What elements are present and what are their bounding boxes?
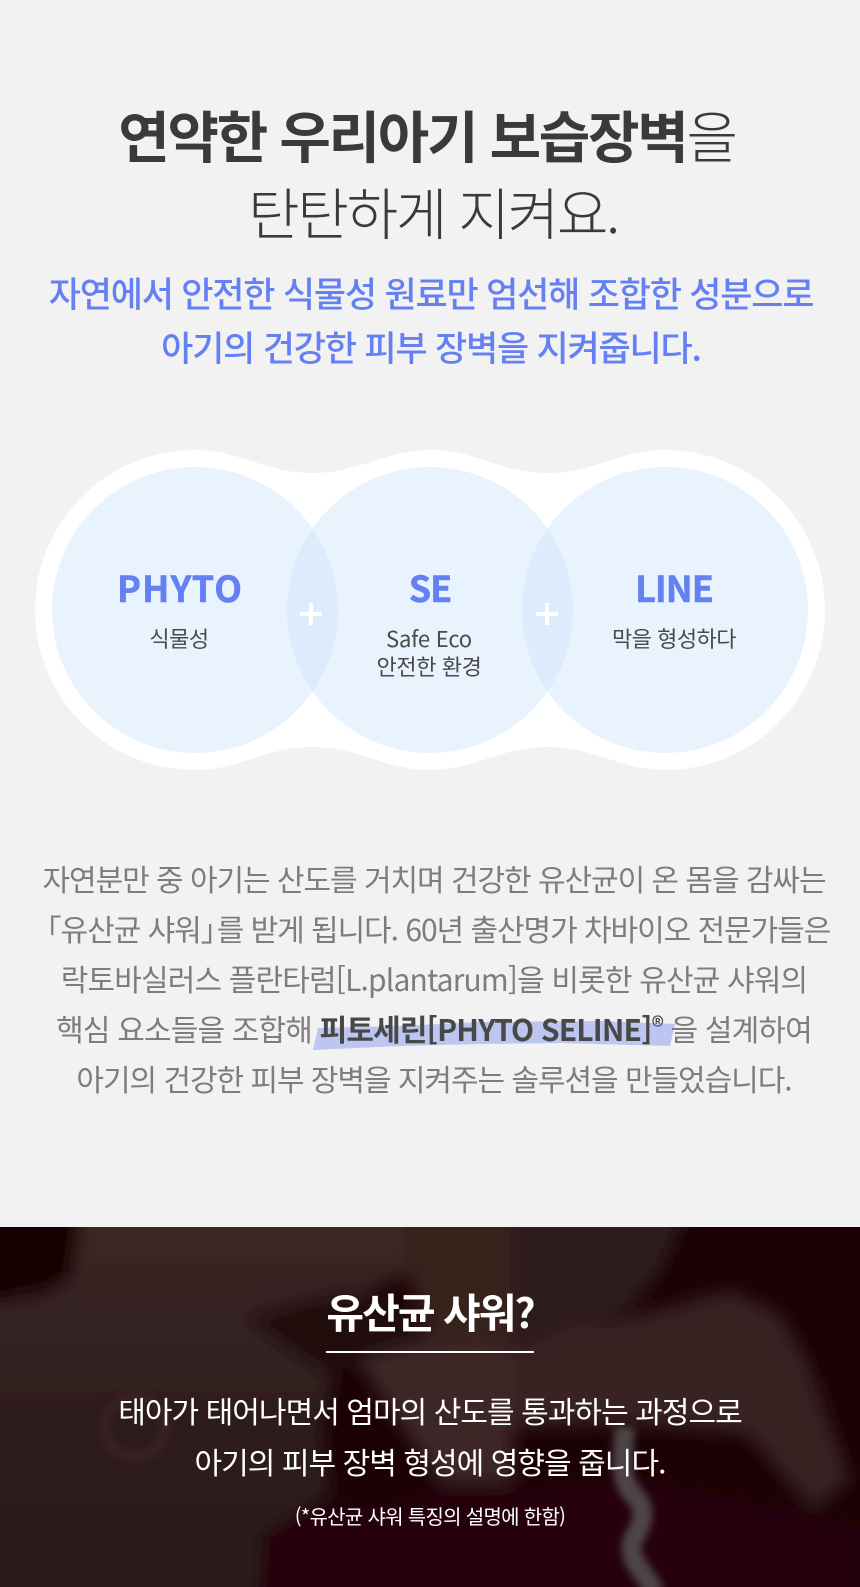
- title line 2: 탄탄하게 지켜요.: [248, 171, 618, 252]
- body paragraph: 아기의 건강한 피부 장벽을 지켜주는 솔루션을 만들었습니다.: [76, 1056, 792, 1100]
- umbilical cord: [623, 1427, 655, 1587]
- title: 연약한 우리아기 보습장벽을: [118, 94, 736, 175]
- diagram: PHYTO + SE + LINE circles: Safe Eco: [386, 622, 472, 654]
- diagram: PHYTO + SE + LINE circles: LINE: [635, 561, 713, 613]
- heading underline: [326, 1351, 534, 1353]
- body paragraph: 핵심 요소들을 조합해 피토세린[PHYTO SELINE]® 을 설계하여: [56, 1006, 812, 1050]
- background: blurred photo: [0, 1227, 856, 1587]
- body paragraph: 자연분만 중 아기는 산도를 거치며 건강한 유산균이 온 몸을 감싸는: [42, 856, 826, 900]
- body paragraph: 락토바실러스 플란타럼[L.plantarum]을 비롯한 유산균 샤워의: [61, 956, 807, 1000]
- description: [118, 1388, 742, 1483]
- body paragraph: [32, 856, 830, 1100]
- diagram: PHYTO + SE + LINE circles: 안전한 환경: [377, 650, 481, 682]
- heading: 유산균 샤워?: [326, 1280, 534, 1340]
- diagram: PHYTO + SE + LINE circles: PHYTO: [117, 561, 242, 613]
- description: 태아가 태어나면서 엄마의 산도를 통과하는 과정으로: [118, 1388, 742, 1432]
- subtitle: [49, 267, 813, 372]
- panel: probiotic shower: [0, 1227, 860, 1587]
- footnote: (*유산균 샤워 특징의 설명에 한함): [295, 1501, 565, 1530]
- diagram: PHYTO + SE + LINE circles: 막을 형성하다: [612, 622, 736, 654]
- subtitle: 자연에서 안전한 식물성 원료만 엄선해 조합한 성분으로: [49, 267, 813, 318]
- highlight brush stroke: [313, 1021, 675, 1050]
- diagram: PHYTO + SE + LINE circles: 식물성: [149, 622, 209, 654]
- subtitle: 아기의 건강한 피부 장벽을 지켜줍니다.: [161, 321, 701, 372]
- body paragraph: 「유산균 샤워」를 받게 됩니다. 60년 출산명가 차바이오 전문가들은: [32, 906, 830, 950]
- description: 아기의 피부 장벽 형성에 영향을 줍니다.: [194, 1439, 666, 1483]
- ear ring: [105, 1397, 165, 1457]
- diagram: PHYTO + SE + LINE circles: [35, 450, 825, 770]
- diagram: PHYTO + SE + LINE circles: SE: [409, 561, 451, 613]
